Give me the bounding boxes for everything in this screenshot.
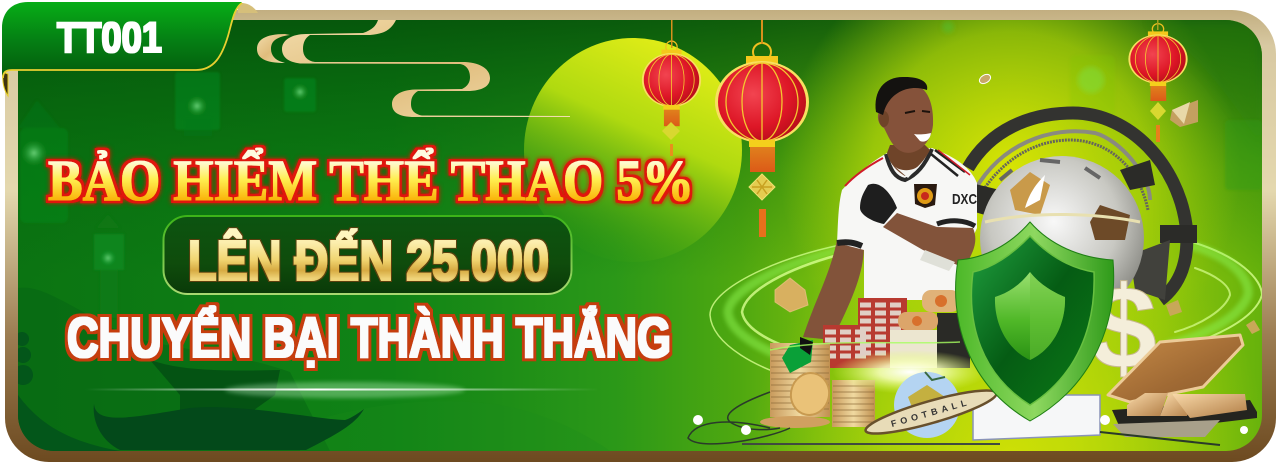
ear [879, 111, 889, 127]
silver ball [980, 156, 1144, 288]
player left arm [803, 240, 864, 340]
jersey collar and trim [837, 149, 975, 246]
faint lanterns [20, 21, 1262, 270]
white base block [973, 395, 1100, 440]
player [803, 77, 977, 340]
panel: amount [164, 216, 572, 294]
crest [914, 184, 937, 208]
eyes and brows [905, 111, 930, 113]
red chip stacks [858, 298, 907, 368]
main title: BẢO HIỂM THỂ THAO 5% [48, 148, 694, 213]
head [878, 84, 933, 153]
football and disc: FOOTBALL [890, 398, 968, 429]
swirl light rings [710, 240, 1262, 380]
ground orbit lines [688, 392, 1220, 445]
black glove [860, 184, 897, 224]
green glove [782, 337, 813, 373]
wrist tape [920, 250, 955, 271]
hills and pagoda silhouette [13, 288, 610, 451]
moon [524, 38, 742, 262]
tab label: TT001 [57, 14, 162, 62]
sponsor mark: DXC [952, 191, 977, 208]
small left lantern [642, 41, 701, 126]
neck [887, 145, 930, 176]
gold coin stacks [770, 343, 830, 417]
chip and coin stacks [760, 290, 970, 428]
lantern strings and knots [662, 20, 1166, 237]
hair [876, 77, 927, 115]
forearm [883, 213, 975, 268]
gold cloud ornament [257, 20, 570, 117]
amount text: LÊN ĐẾN 25.000 [188, 228, 549, 293]
player jersey [837, 148, 977, 300]
tab: TT001 [2, 2, 258, 96]
large centre lantern [715, 43, 809, 172]
smile [914, 133, 931, 142]
orbit beads [693, 415, 1248, 435]
floating gems and rings [775, 73, 1260, 334]
black ring [967, 113, 1197, 300]
subtitle: CHUYỂN BẠI THÀNH THẮNG [67, 305, 671, 370]
white flash [770, 342, 988, 394]
football and disc [863, 372, 999, 441]
top right lantern [1128, 24, 1188, 101]
shield [956, 222, 1114, 421]
gold case [1108, 335, 1257, 437]
dollar sign: $ [1090, 262, 1157, 394]
rings and gift box [890, 330, 940, 368]
glow line [85, 382, 600, 398]
